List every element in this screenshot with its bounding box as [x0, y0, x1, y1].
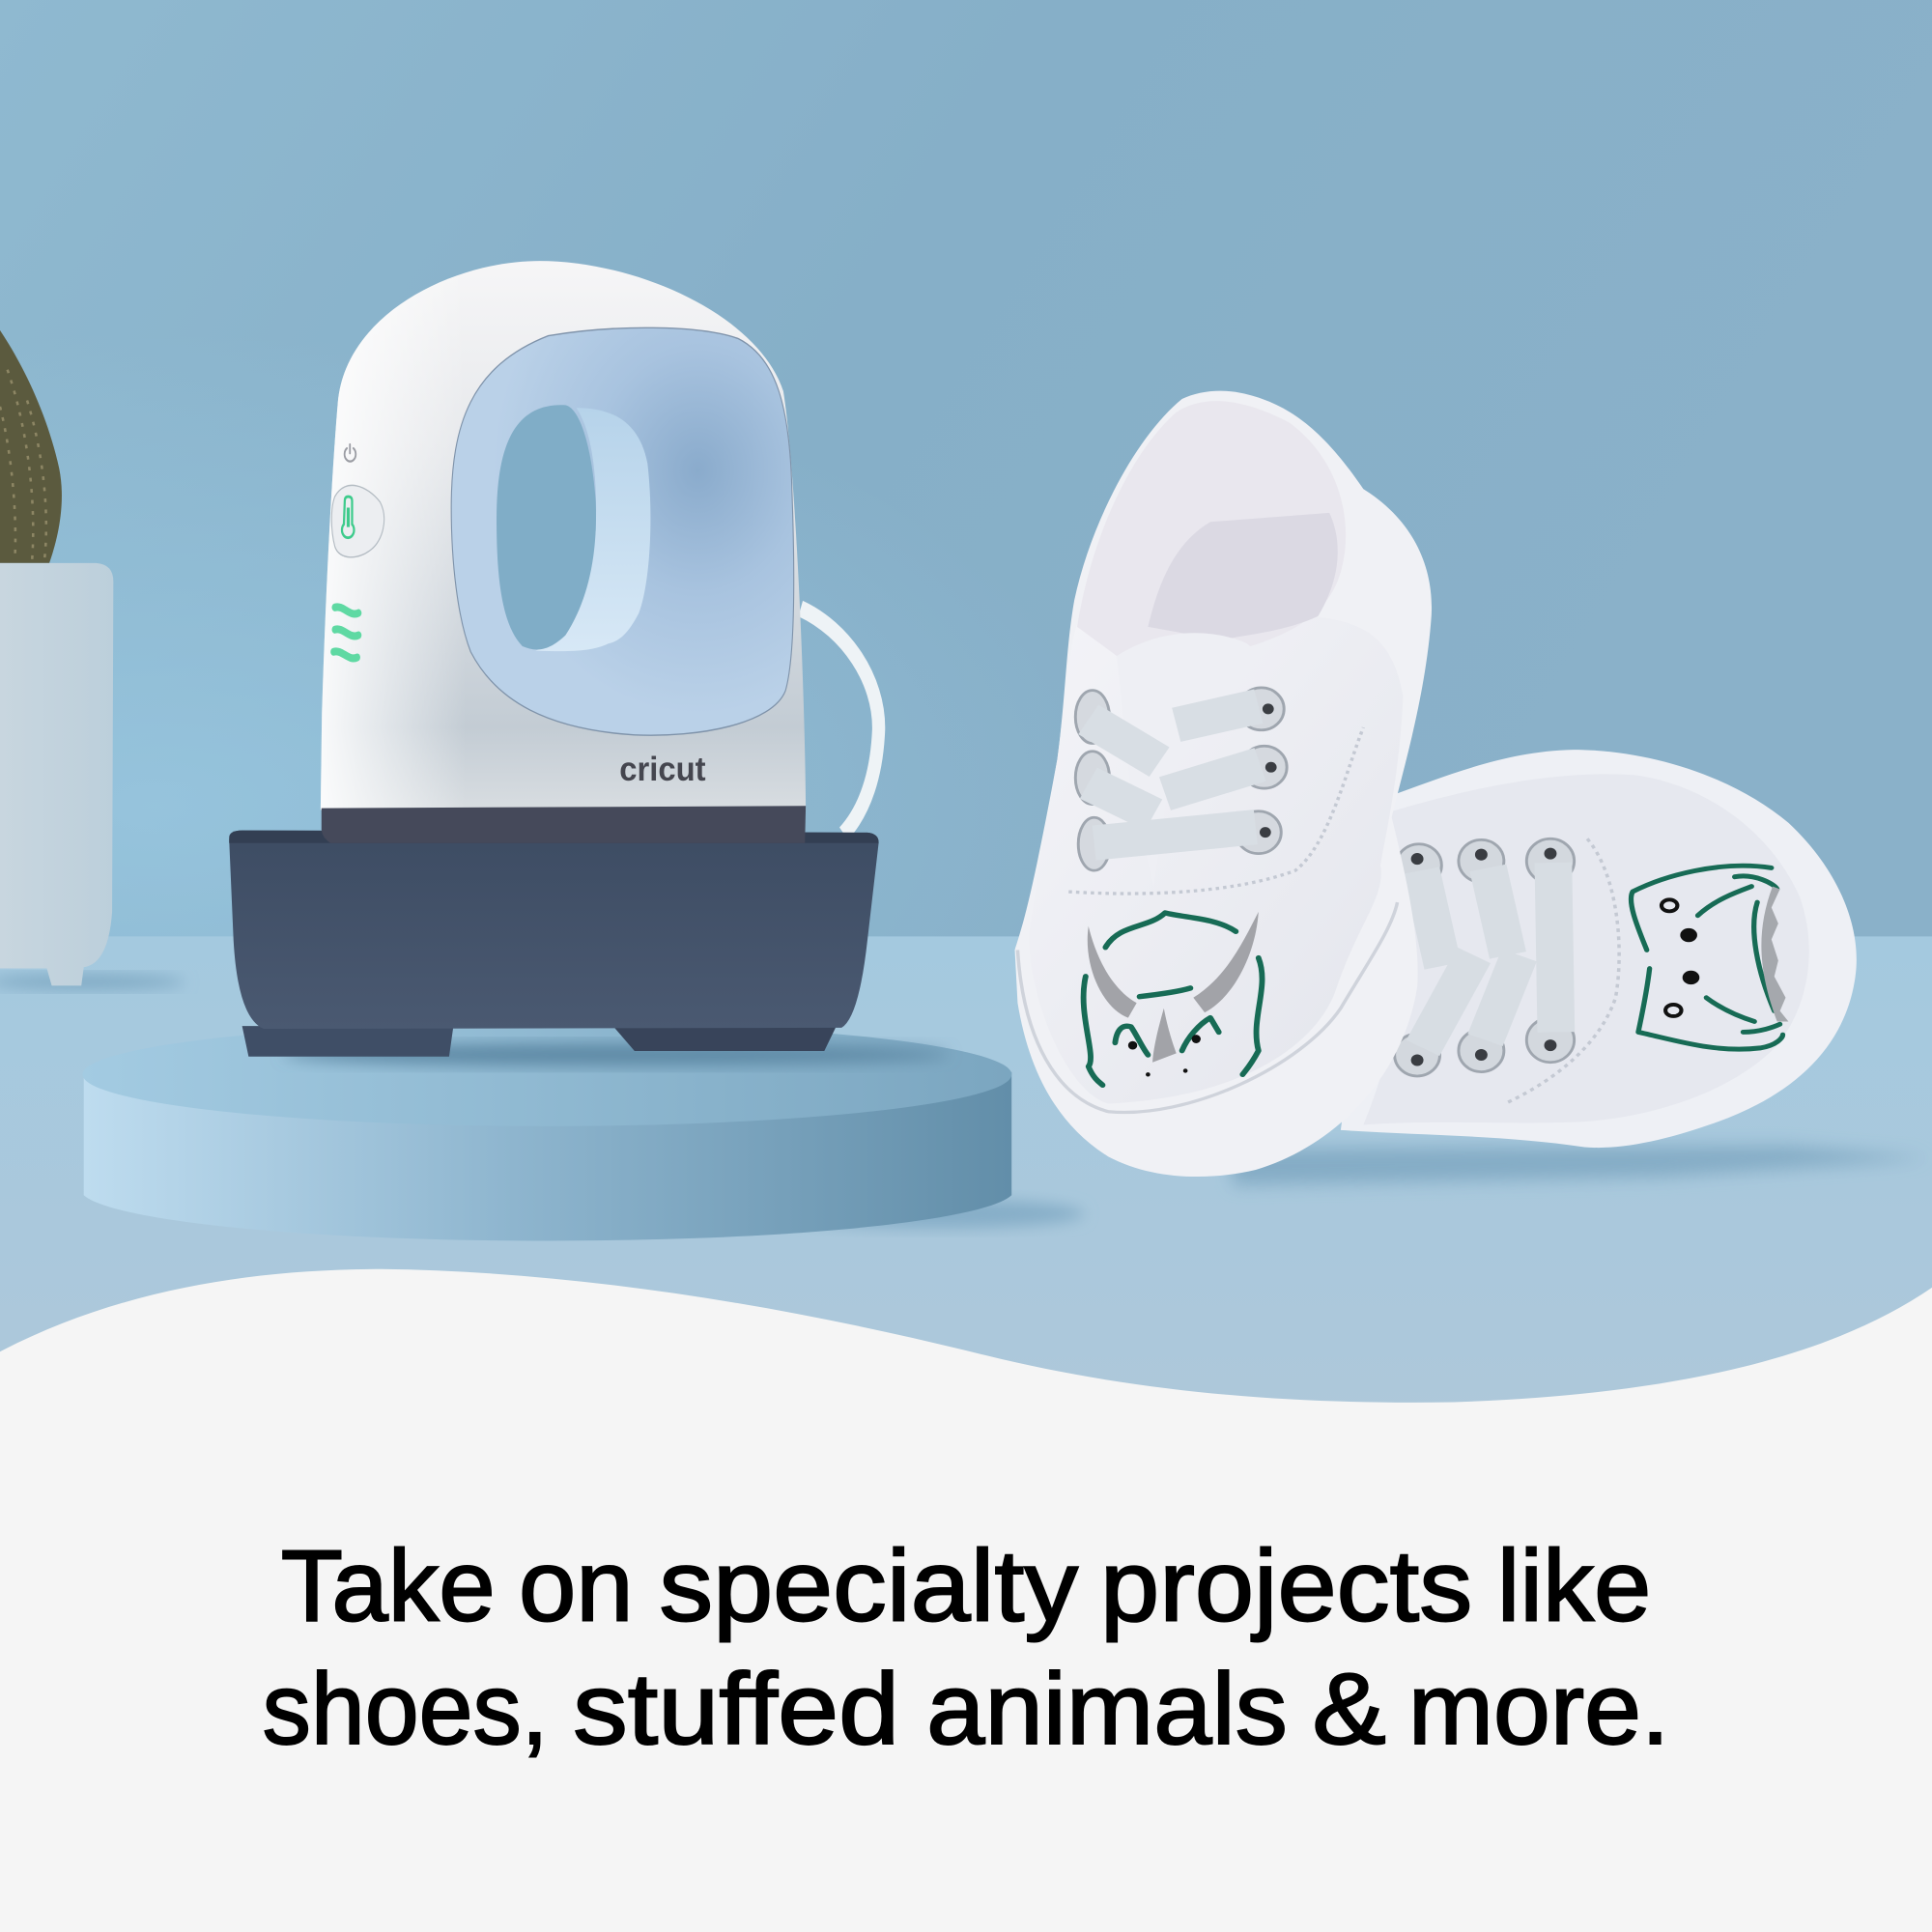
- white wave panel: [0, 1269, 1932, 1932]
- pot floor shadow: [0, 975, 185, 989]
- potted cactus: [0, 330, 185, 989]
- fox eyes: [1662, 899, 1699, 1016]
- triceratops decal: [1084, 913, 1263, 1085]
- power icon: [345, 444, 355, 462]
- base rim: [229, 831, 879, 843]
- headline line 1: projects: [1100, 1529, 1472, 1642]
- headline line 2: animals: [926, 1653, 1288, 1766]
- base tray: [229, 831, 879, 1029]
- headline line 2: more.: [1408, 1653, 1669, 1766]
- wall background: [0, 0, 1932, 949]
- sole rim line: [1017, 902, 1398, 1113]
- rear shoe: [1341, 750, 1857, 1148]
- headline: [263, 1529, 1669, 1766]
- podium side: [84, 1072, 1011, 1240]
- rear shoe toe stitching: [1505, 838, 1619, 1103]
- vamp stitching: [1068, 727, 1363, 894]
- headline line 2: &: [1312, 1653, 1386, 1766]
- cricut logo: cricut: [619, 750, 706, 788]
- rear eyelets: [1395, 838, 1575, 1076]
- pair of shoes: [1015, 391, 1857, 1177]
- round podium: [82, 1023, 1011, 1240]
- mini heat press: [229, 261, 879, 1057]
- podium floor shadow: [788, 1199, 1084, 1229]
- front shoe sole: [1015, 391, 1432, 1177]
- thermometer icon: [342, 497, 354, 538]
- headline line 1: [281, 1529, 1651, 1642]
- rear eyelet holes: [1411, 848, 1556, 1066]
- cactus spines: [0, 370, 46, 560]
- front laces: [1089, 706, 1261, 843]
- rear laces: [1421, 863, 1556, 1048]
- temperature button: [331, 485, 384, 557]
- body highlight: [321, 261, 806, 810]
- rear shoe sole: [1341, 750, 1857, 1148]
- heat indicator waves: [333, 607, 358, 658]
- shadow under press: [283, 1043, 949, 1065]
- headline line 1: like: [1497, 1529, 1651, 1642]
- insole: [1148, 513, 1338, 640]
- rear shoe canvas: [1363, 774, 1809, 1124]
- handle inner surface: [535, 408, 650, 651]
- handle panel: [451, 327, 794, 735]
- headline line 2: stuffed: [573, 1653, 899, 1766]
- front eyelets: [1075, 688, 1287, 870]
- dark collar strip: [322, 806, 806, 843]
- front eyelet holes: [1260, 703, 1277, 838]
- base feet: [242, 1026, 837, 1057]
- podium top face: [82, 1023, 1011, 1126]
- cactus plant: [0, 330, 62, 563]
- headline line 1: on: [519, 1529, 634, 1642]
- shoe shadow: [1233, 1146, 1932, 1185]
- heel collar: [1077, 401, 1346, 656]
- handle opening: [497, 405, 596, 649]
- headline line 2: [263, 1653, 1669, 1766]
- headline line 1: Take: [281, 1529, 496, 1642]
- triceratops horns: [1088, 912, 1259, 1063]
- headline line 1: specialty: [659, 1529, 1079, 1642]
- tongue: [1117, 633, 1252, 887]
- headline line 2: shoes,: [263, 1653, 549, 1766]
- wall left glow: [0, 0, 1932, 949]
- front shoe canvas upper: [1029, 616, 1403, 1103]
- triceratops eyes and nostrils: [1128, 1035, 1201, 1077]
- floor background: [0, 936, 1932, 1430]
- planter pot: [0, 563, 113, 985]
- fox face decal: [1631, 866, 1783, 1049]
- power cable: [801, 609, 879, 834]
- iron body: [321, 261, 806, 810]
- front shoe: [1015, 391, 1432, 1177]
- fox gray teeth: [1761, 887, 1788, 1021]
